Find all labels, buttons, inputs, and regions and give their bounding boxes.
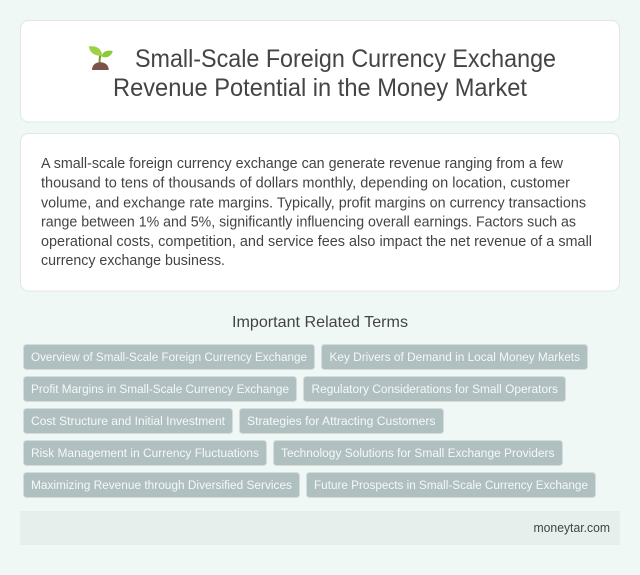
description text: operational costs, competition, and service fees also impact the net revenue of a small: [41, 233, 592, 250]
tag: key drivers: [322, 344, 588, 370]
title text: [113, 46, 556, 102]
tag: cost structure: [24, 408, 232, 434]
title text: Revenue Potential in the Money Market: [113, 75, 527, 102]
tag: maximizing revenue: [24, 472, 300, 498]
title text: Small-Scale Foreign Currency Exchange: [135, 46, 556, 73]
tags list: [24, 344, 596, 498]
tag: future prospects: [306, 472, 596, 498]
footer source text: moneytar.com: [534, 521, 610, 535]
tag: risk management: [24, 440, 266, 466]
tag: risk management: Risk Management in Currency Fluctuations: [31, 446, 259, 460]
description text: [41, 155, 592, 269]
icon: seedling: [89, 46, 113, 70]
tag: key drivers: Key Drivers of Demand in Local Money Markets: [330, 350, 580, 364]
tag: profit margins: Profit Margins in Small-Scale Currency Exchange: [31, 382, 289, 396]
panel: title card: [20, 20, 620, 122]
tag: strategies: Strategies for Attracting Customers: [247, 414, 436, 428]
tag: maximizing revenue: Maximizing Revenue through Diversified Services: [31, 478, 292, 492]
panel: description card: [20, 134, 620, 291]
tag: overview: [24, 344, 314, 370]
footer bar: [20, 511, 620, 545]
tag: profit margins: [24, 376, 296, 402]
description text: volume, and exchange rate margins. Typically, profit margins on currency transactions: [41, 194, 586, 212]
tag: overview: Overview of Small-Scale Foreign Currency Exchange: [31, 350, 307, 364]
tag: technology: Technology Solutions for Small Exchange Providers: [281, 446, 554, 460]
description text: thousand to tens of thousands of dollars monthly, depending on location, customer: [41, 174, 570, 192]
tag: future prospects: Future Prospects in Small-Scale Currency Exchange: [314, 478, 588, 492]
tag: regulatory: [304, 376, 566, 402]
tag: technology: [274, 440, 562, 466]
description text: currency exchange business.: [41, 252, 225, 269]
description text: range between 1% and 5%, significantly influencing overall earnings. Factors such as: [41, 214, 576, 230]
heading: important related terms: Important Related Terms: [232, 314, 408, 331]
description text: A small-scale foreign currency exchange can generate revenue ranging from a few: [41, 155, 563, 172]
tag: cost structure: Cost Structure and Initial Investment: [31, 414, 226, 428]
tag: regulatory: Regulatory Considerations for Small Operators: [312, 382, 558, 396]
tag: strategies: [240, 408, 444, 434]
